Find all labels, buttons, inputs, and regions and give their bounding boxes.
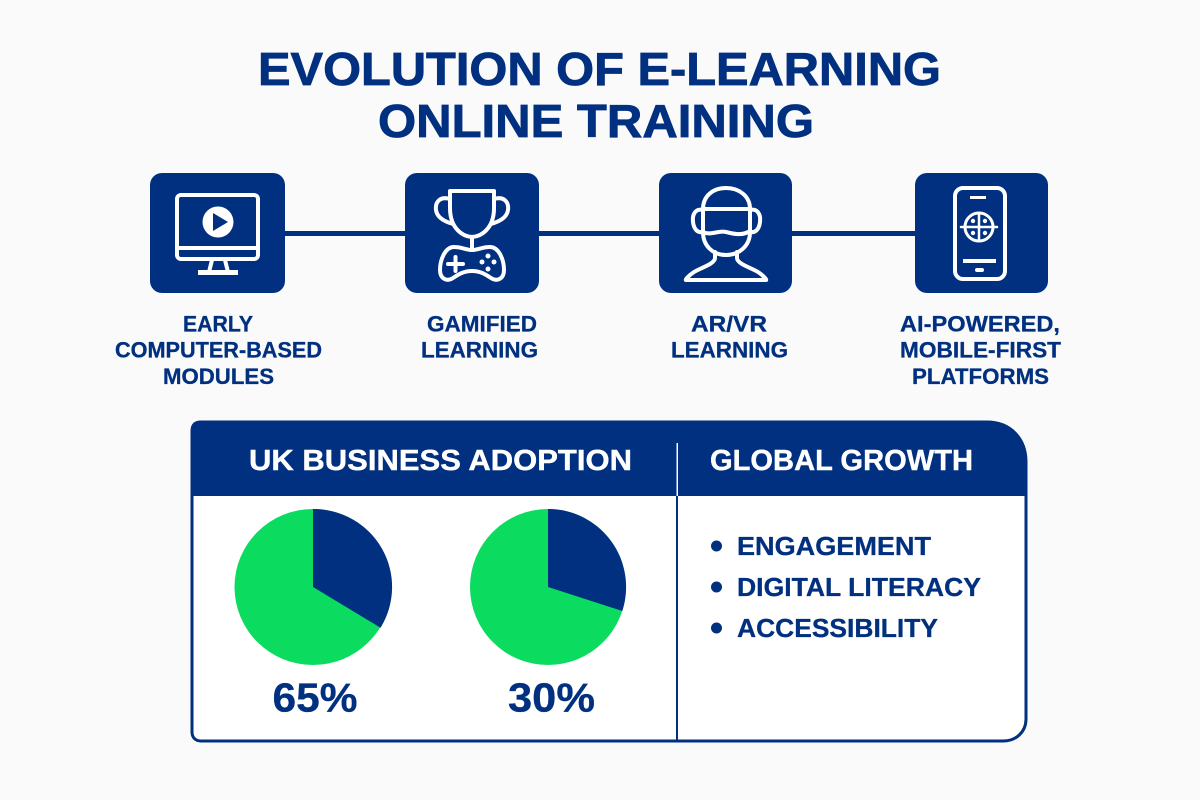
list: global growth factors: DIGITAL LITERACY xyxy=(737,572,981,602)
panel: AI-powered mobile-first platforms xyxy=(900,173,1061,389)
icon: monitor with play button xyxy=(177,195,258,275)
icon: trophy and game controller xyxy=(436,191,508,280)
list: global growth factors xyxy=(711,531,981,643)
label: EARLY xyxy=(183,312,253,336)
label: COMPUTER-BASED xyxy=(115,338,322,362)
heading: global growth: GLOBAL GROWTH xyxy=(710,445,973,477)
heading: UK business adoption: UK BUSINESS ADOPTION xyxy=(249,445,632,477)
label: LEARNING xyxy=(421,338,538,362)
label: GAMIFIED xyxy=(427,312,537,336)
pie chart: 65% xyxy=(234,509,392,665)
list: global growth factors: ENGAGEMENT xyxy=(737,531,931,561)
panel: data table xyxy=(191,421,1027,741)
value: 65%: 65% xyxy=(272,674,358,720)
label xyxy=(421,312,538,362)
label xyxy=(671,312,788,362)
label: AR/VR xyxy=(691,312,767,336)
title xyxy=(258,43,941,147)
label: AI-POWERED, xyxy=(900,312,1060,336)
label xyxy=(115,312,322,389)
timeline connector xyxy=(285,231,915,236)
label: MOBILE-FIRST xyxy=(900,338,1061,362)
panel: early computer-based modules xyxy=(115,173,322,389)
icon: person wearing VR headset xyxy=(686,188,766,280)
label: LEARNING xyxy=(671,338,788,362)
title: EVOLUTION OF E-LEARNING xyxy=(258,43,941,95)
label xyxy=(900,312,1061,389)
value: 30%: 30% xyxy=(508,674,595,720)
panel: gamified learning xyxy=(405,173,539,362)
list: global growth factors: ACCESSIBILITY xyxy=(737,613,938,643)
title: ONLINE TRAINING xyxy=(378,95,814,147)
label: MODULES xyxy=(163,364,274,389)
pie chart: 30% xyxy=(470,509,626,665)
icon: smartphone with AI dial xyxy=(955,188,1005,279)
panel: AR/VR learning xyxy=(659,173,792,362)
label: PLATFORMS xyxy=(912,364,1049,389)
